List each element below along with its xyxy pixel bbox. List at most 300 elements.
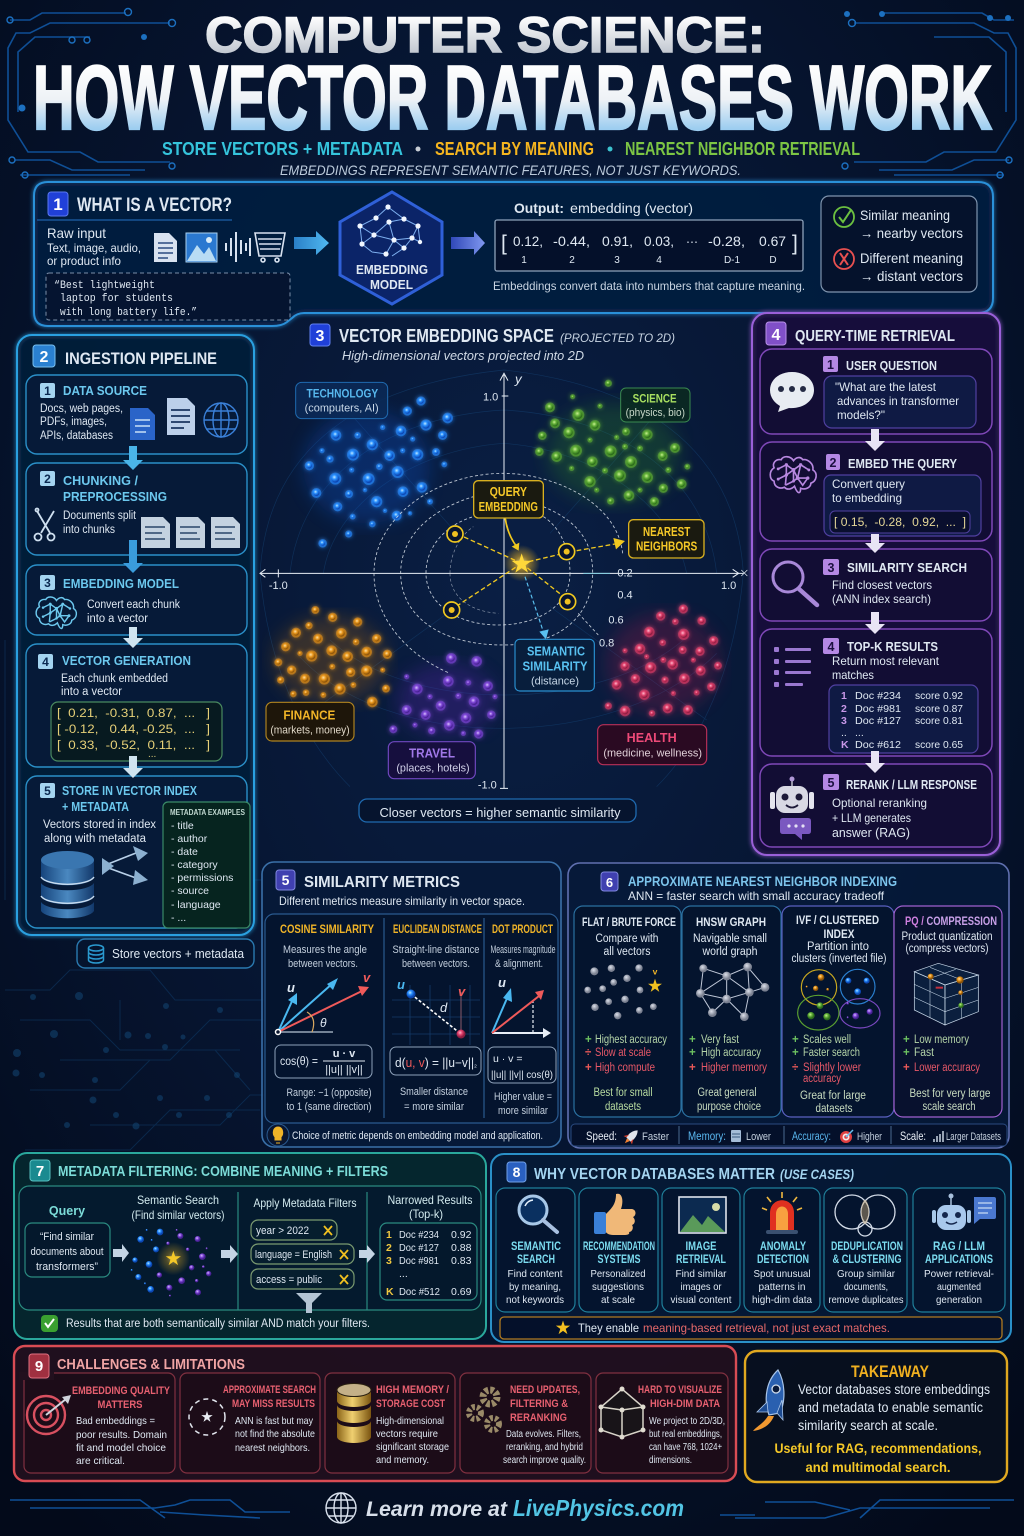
subtitle tagline: STORE VECTORS + METADATA [162,139,403,159]
card: embedding quality: are critical. [76,1455,125,1467]
step 4: top-k results: score 0.92 [915,690,963,702]
step: metadata filters [251,1196,356,1313]
step 5: store in vector index: Vectors stored in index [43,819,156,831]
step 4: top-k results: score 0.87 [915,703,963,715]
step 2: chunking: into chunks [63,524,115,536]
step 4: vector generation: VECTOR GENERATION [62,653,191,668]
query neighbours and connections [444,517,625,639]
card: flat / brute force: FLAT / BRUTE FORCE [582,915,676,929]
ann legend bar: Larger Datasets [946,1131,1001,1143]
card: updates, filtering, reranking: reranking, and hybrid [506,1442,583,1453]
card: deduplication & clustering: remove duplicates [828,1294,904,1306]
step 3: embedding model: into a vector [87,613,148,625]
step 4: top-k results: ... [855,727,864,739]
output heading: Output: [514,200,564,216]
step 4: top-k results: TOP-K RESULTS [847,639,938,654]
label: technology [296,382,388,419]
metric: dot product: Higher value = [494,1091,552,1103]
card: flat / brute force: v [653,966,658,976]
arrow [123,627,143,648]
card: ivf / clustered index: Great for large [800,1090,866,1102]
card: recommendation systems: at scale [601,1294,635,1306]
subtitle tagline [162,139,860,159]
label: semantic similarity: SIMILARITY [522,660,588,674]
similarity legend: Similar meaning [860,207,950,223]
metric: cosine similarity: θ [320,1016,327,1030]
cluster: science [536,381,689,505]
label: nearest neighbors: NEAREST [643,525,691,539]
footer: learn more [326,1493,684,1523]
step 3: similarity search: Find closest vectors [832,578,932,592]
metric: cosine similarity: v [363,970,371,985]
card: image retrieval [662,1188,740,1312]
heading: what is a vector: 1 [53,195,63,214]
label: health [598,725,707,765]
card: flat / brute force: Slow at scale [595,1047,651,1059]
ann legend bar: Accuracy: [792,1131,831,1143]
step 2: embed the query: 2 [830,456,837,470]
card: semantic search: Find content [508,1268,563,1280]
step: narrowed results: ... [399,1268,408,1280]
step 4: top-k results: Doc #612 [855,739,901,751]
card: pq / compression: + [903,1047,910,1059]
cluster: travel [390,654,497,738]
card: memory cost [325,1373,455,1473]
step: query: transformers” [36,1261,98,1273]
note: metric choice: Choice of metric depends on embedding model and application. [292,1130,543,1142]
label: technology: TECHNOLOGY [306,387,378,401]
metric: cosine similarity: Range: −1 (opposite) [286,1087,372,1099]
step: narrowed results: Doc #981 [399,1255,439,1267]
metadata examples: METADATA EXAMPLES [170,808,246,817]
card: updates, filtering, reranking [460,1373,591,1473]
metric: euclidean distance: = more similar [404,1101,464,1113]
metric: cosine similarity: u [287,980,295,995]
vector output box: 3 [614,255,620,266]
step 4: top-k results: Doc #234 [855,690,901,702]
banner: meaning-based retrieval: They enable [578,1321,639,1335]
metric: cosine similarity: cos(θ) = [280,1054,318,1068]
metric: euclidean distance: between vectors. [402,958,470,970]
card: ivf / clustered index: Slightly lower [803,1062,861,1074]
metric: dot product: & alignment. [495,958,543,970]
card: image retrieval: visual content [670,1294,732,1306]
card: updates, filtering, reranking: search improve quality. [503,1455,586,1466]
heading: ann indexing: APPROXIMATE NEAREST NEIGHBOR INDEXING [628,873,897,889]
vector output box: 1 [521,255,527,266]
subtitle tagline: NEAREST NEIGHBOR RETRIEVAL [625,139,860,159]
step: metadata filters: language = English [255,1249,332,1261]
store vectors pill: Store vectors + metadata [112,946,245,961]
card: hnsw graph: world graph [702,946,758,958]
step 4: top-k results: Return most relevant [832,654,940,668]
step 4: top-k results: score 0.65 [915,739,963,751]
note: results [41,1315,370,1332]
ann legend bar: Faster [642,1131,669,1143]
card: anomaly detection: Spot unusual [754,1268,810,1280]
axis and ring numbers: 1.0 [721,580,736,592]
panel 5: similarity metrics [262,862,561,1147]
card: hard to visualize: but real embeddings, [649,1429,722,1440]
metadata examples: - category [171,859,218,871]
arrow [294,231,329,255]
card: pq / compression: + [903,1034,910,1046]
axis and ring numbers: -1.0 [269,580,288,592]
step 1: data source: DATA SOURCE [63,383,147,398]
embedding model hexagon [340,192,442,304]
raw input text [47,225,141,268]
similarity legend: → distant vectors [860,268,963,284]
card: hnsw graph: Navigable small [693,933,767,945]
heading: similarity metrics: Different metrics measure similarity in vector space. [279,894,525,908]
arrow [865,612,885,634]
card: ivf / clustered index: + [792,1047,799,1059]
cluster: finance [275,607,391,706]
raw input text: or product info [47,254,121,268]
step 2: chunking: Documents split [63,510,137,522]
step 4: top-k results: Doc #127 [855,715,901,727]
step: narrowed results: K [386,1286,394,1298]
vector output box: 0.03, [644,233,674,249]
heading: use cases: 8 [513,1164,521,1180]
banner: meaning-based retrieval [500,1317,1002,1339]
card: ivf / clustered index: + [792,1034,799,1046]
step 1: data source: Docs, web pages, [40,403,123,415]
step: narrowed results [380,1193,477,1300]
similarity legend: Different meaning [860,250,963,266]
heading: similarity metrics: SIMILARITY METRICS [304,874,460,891]
step 1: user question: USER QUESTION [846,358,937,373]
step 4: vector generation: [ -0.12, 0.44, -0.25, ... ] [57,724,210,736]
panel 9: challenges and limitations [14,1346,736,1481]
vector output box: -0.28, [708,233,745,249]
card: memory cost: vectors require [376,1428,438,1440]
card: embedding quality: poor results. Domain [76,1429,167,1441]
card: approximate search: nearest neighbors. [235,1442,310,1454]
heading: ingestion pipeline [33,345,217,368]
heading: vector embedding space: High-dimensional vectors projected into 2D [342,349,584,363]
card: flat / brute force: Compare with [596,933,658,945]
note: closer vectors [359,799,636,822]
metric: dot product: DOT PRODUCT [492,924,553,936]
label: health: HEALTH [627,731,677,745]
step 5: rerank / llm response: 5 [828,776,835,790]
card: ivf / clustered index: Scales well [803,1034,851,1046]
arrow [123,540,143,573]
step 2: chunking: PREPROCESSING [63,489,167,504]
card: ivf / clustered index: accuracy [803,1073,841,1085]
axis and ring numbers [269,371,736,792]
panel 3: vector embedding space [260,324,747,822]
ann legend bar [571,1124,1007,1147]
step 4: top-k results: 1 [841,690,847,702]
heading: query-time retrieval [766,322,955,345]
card: pq / compression: PQ / COMPRESSION [905,914,997,928]
card: ivf / clustered index: Faster search [803,1047,860,1059]
step 5: rerank / llm response: RERANK / LLM RESPONSE [846,777,977,792]
card: approximate search: APPROXIMATE SEARCH [223,1384,316,1396]
step: narrowed results: 3 [386,1255,392,1267]
label: health: (medicine, wellness) [603,748,702,760]
card: image retrieval: RETRIEVAL [676,1252,726,1266]
label: travel: TRAVEL [409,746,455,760]
step: narrowed results: Narrowed Results [388,1193,472,1207]
card: pq / compression: scale search [922,1101,976,1113]
step 4: top-k results: K [841,739,849,751]
card: memory cost: significant storage [376,1441,449,1453]
metric: dot product: u · v = [493,1053,522,1065]
vector output box: [ [501,232,507,255]
arrow [865,534,885,553]
icon: robot [770,776,814,840]
label: query embedding [474,481,543,518]
subtitle tagline: SEARCH BY MEANING [435,139,594,159]
vector output box: ··· [686,233,698,249]
metadata examples: - author [171,833,208,845]
card: deduplication & clustering: & CLUSTERING [832,1252,902,1266]
step: semantic search: (Find similar vectors) [132,1208,224,1222]
panel: takeaway: and multimodal search. [806,1459,950,1475]
card: hnsw graph: + [689,1034,696,1046]
step 4: top-k results: Doc #981 [855,703,901,715]
card: flat / brute force: + [585,1034,592,1046]
heading: metadata filtering [30,1160,388,1181]
ann legend bar: Higher [857,1131,882,1143]
card: pq / compression: (compress vectors) [906,943,989,955]
step: semantic search: Semantic Search [137,1193,219,1207]
card: embedding quality: MATTERS [98,1399,142,1411]
card: deduplication & clustering [824,1188,907,1312]
label: semantic similarity: (distance) [531,676,579,688]
metadata examples: - source [171,885,209,897]
card: anomaly detection: patterns in [758,1281,806,1293]
step: metadata filters: Apply Metadata Filters [254,1196,356,1210]
heading: what is a vector: WHAT IS A VECTOR? [77,195,232,216]
metric: euclidean distance: EUCLIDEAN DISTANCE [393,924,482,936]
footer: learn more: Learn more at [366,1498,508,1521]
card: hard to visualize: HARD TO VISUALIZE [638,1384,722,1396]
step 3: similarity search [760,549,992,621]
metric: cosine similarity: u · v [333,1048,356,1060]
label: technology: (computers, AI) [305,403,379,415]
similarity legend: → nearby vectors [860,225,963,241]
card: embedding quality: fit and model choice [76,1442,166,1454]
icon: magnifier [773,562,817,605]
step 3: similarity search: (ANN index search) [832,592,931,606]
axis and ring numbers: 0.2 [617,568,633,580]
metric: dot product: u [498,975,506,990]
card: hard to visualize: can have 768, 1024+ [649,1442,722,1453]
step 3: embedding model: 3 [44,576,51,590]
label: query embedding: EMBEDDING [479,499,538,514]
step: narrowed results: 1 [386,1229,392,1241]
card: pq / compression [894,906,1002,1117]
step: query: “Find similar [40,1231,94,1243]
output heading: embedding (vector) [570,200,693,216]
heading: use cases: WHY VECTOR DATABASES MATTER [534,1166,775,1183]
card: image retrieval: Find similar [676,1268,727,1280]
card: hard to visualize [596,1373,728,1473]
metric: euclidean distance: u [397,977,405,992]
axes [260,373,747,788]
label: query embedding: QUERY [490,484,527,499]
card: ivf / clustered index [782,906,894,1117]
distance rings [374,473,623,673]
raw input text: Raw input [47,225,106,241]
card: hard to visualize: dimensions. [649,1455,692,1466]
label: finance [266,702,354,741]
vector output box: 2 [569,255,575,266]
example quote: laptop for students [60,293,173,305]
step: narrowed results: 2 [386,1242,392,1254]
label: travel [388,742,475,779]
card: deduplication & clustering: documents, [844,1281,888,1293]
example quote: with long battery life.” [60,307,197,319]
panel 6: approximate nearest neighbor indexing [568,863,1009,1148]
example quote: “Best lightweight [54,280,155,292]
card: recommendation systems [579,1188,658,1312]
card: flat / brute force: all vectors [604,946,651,958]
card: hnsw graph: Higher memory [701,1062,767,1074]
card: semantic search: not keywords [506,1294,564,1306]
card: memory cost: HIGH MEMORY / [376,1384,449,1396]
step 5: store in vector index: + METADATA [62,799,129,814]
card: updates, filtering, reranking: FILTERING & [510,1398,568,1410]
step 2: chunking [26,463,247,555]
card: rag / llm applications: APPLICATIONS [925,1252,993,1266]
card: flat / brute force: datasets [605,1101,641,1113]
metadata examples: - ... [171,912,186,924]
label: finance: FINANCE [283,708,335,722]
card: flat / brute force [574,906,681,1117]
step 2: embed the query: to embedding [832,491,902,505]
metric: euclidean distance: Smaller distance [400,1086,468,1098]
card: flat / brute force: High compute [595,1062,655,1074]
step 4: top-k results: 2 [841,703,847,715]
card: rag / llm applications: RAG / LLM [933,1239,985,1253]
caption: Embeddings convert data into numbers that capture meaning. [493,279,805,293]
card: approximate search: ANN is fast but may [235,1415,314,1427]
step 4: vector generation: 4 [42,655,49,669]
heading: challenges [19,1354,245,1380]
axis and ring numbers: -1.0 [478,780,497,792]
step 3: similarity search: 3 [828,561,835,575]
panel: takeaway: Vector databases store embeddings [798,1382,990,1397]
metadata examples: - language [171,899,221,911]
label: nearest neighbors: NEIGHBORS [636,539,697,553]
step 4: top-k results [760,629,992,756]
step: query [25,1204,110,1277]
card: flat / brute force: + [585,1062,592,1074]
card: anomaly detection: ANOMALY [760,1239,806,1253]
heading: metadata filtering: 7 [36,1163,44,1180]
label: semantic similarity [515,639,594,691]
heading: ann indexing: ANN = faster search with small accuracy tradeoff [628,889,885,903]
step 4: vector generation: ... [148,749,156,760]
card: embedding quality: Bad embeddings = [76,1415,155,1427]
step 4: top-k results: score 0.81 [915,715,963,727]
label: nearest neighbors [629,520,704,558]
icon: list [774,647,811,687]
panel: takeaway: TAKEAWAY [851,1362,930,1381]
card: hnsw graph: purpose choice [697,1101,761,1113]
icon: image [186,233,217,262]
heading: query-time retrieval: 4 [772,327,781,344]
vector output box: -0.44, [553,233,590,249]
card: pq / compression: Fast [914,1047,935,1059]
card: rag / llm applications [913,1188,1005,1312]
step: narrowed results: Doc #234 [399,1229,439,1241]
arrow [221,1245,238,1263]
heading: metadata filtering: METADATA FILTERING: COMBINE MEANING + FILTERS [58,1163,388,1180]
step 4: vector generation [26,644,247,767]
similarity legend [821,196,977,292]
icon: database [41,851,94,918]
card: rag / llm applications: augmented [937,1281,981,1293]
card: pq / compression: Best for very large [910,1088,990,1100]
label: science: (physics, bio) [626,407,685,419]
arrow [359,1245,375,1263]
metadata examples [163,802,250,928]
icon: vector arrows [102,846,148,885]
vector output box: D [769,255,777,266]
panel 8: why vector databases matter [491,1154,1011,1342]
card: anomaly detection: high-dim data [752,1294,812,1306]
axis and ring numbers: 0.8 [599,638,614,650]
card: image retrieval: IMAGE [686,1239,716,1253]
panel 2: ingestion pipeline [17,335,254,935]
step 4: vector generation: Each chunk embedded [61,673,168,685]
step: metadata filters: year > 2022 [256,1225,309,1237]
heading: similarity metrics: 5 [282,872,290,888]
card: hnsw graph: Very fast [701,1034,740,1046]
icon: funnel [296,1293,322,1313]
step 3: embedding model [26,565,247,635]
step 1: user question [760,349,992,434]
heading: vector embedding space: (PROJECTED TO 2D) [560,331,675,345]
metric: euclidean distance: d(u, v) = ||u−v||₂ [395,1056,477,1070]
step: semantic search [131,1193,224,1297]
heading: query-time retrieval: QUERY-TIME RETRIEVAL [795,328,955,345]
card: flat / brute force: Highest accuracy [595,1034,667,1046]
label: travel: (places, hotels) [396,762,470,774]
panel: takeaway: Useful for RAG, recommendations, [774,1440,982,1456]
metric: euclidean distance: Straight-line distance [392,944,480,956]
note: metric choice [267,1124,543,1146]
step 5: rerank / llm response: answer (RAG) [832,825,910,840]
metric: dot product [488,924,556,1117]
panel 1: what is a vector [34,182,993,326]
metric: cosine similarity: to 1 (same direction) [286,1101,372,1113]
note: closer vectors: Closer vectors = higher semantic similarity [380,805,621,820]
heading: use cases [507,1162,854,1183]
card: recommendation systems: SYSTEMS [598,1252,640,1266]
banner: meaning-based retrieval: meaning-based retrieval, not just exact matches. [643,1321,890,1335]
card: memory cost: High-dimensional [376,1415,444,1427]
title [33,7,992,149]
card: flat / brute force: Best for small [594,1087,652,1099]
heading: what is a vector [37,192,232,220]
card: updates, filtering, reranking: Data evolves. Filters, [506,1429,581,1440]
card: updates, filtering, reranking: NEED UPDATES, [510,1384,580,1396]
step 1: user question: advances in transformer [837,394,959,408]
card: memory cost: STORAGE COST [376,1398,445,1410]
metric: cosine similarity: ||u|| ||v|| [325,1064,363,1076]
metric: cosine similarity: Measures the angle [283,944,367,956]
step: query: Query [49,1204,85,1218]
heading: similarity metrics [276,870,525,908]
vector output box: 0.67 [759,233,786,249]
